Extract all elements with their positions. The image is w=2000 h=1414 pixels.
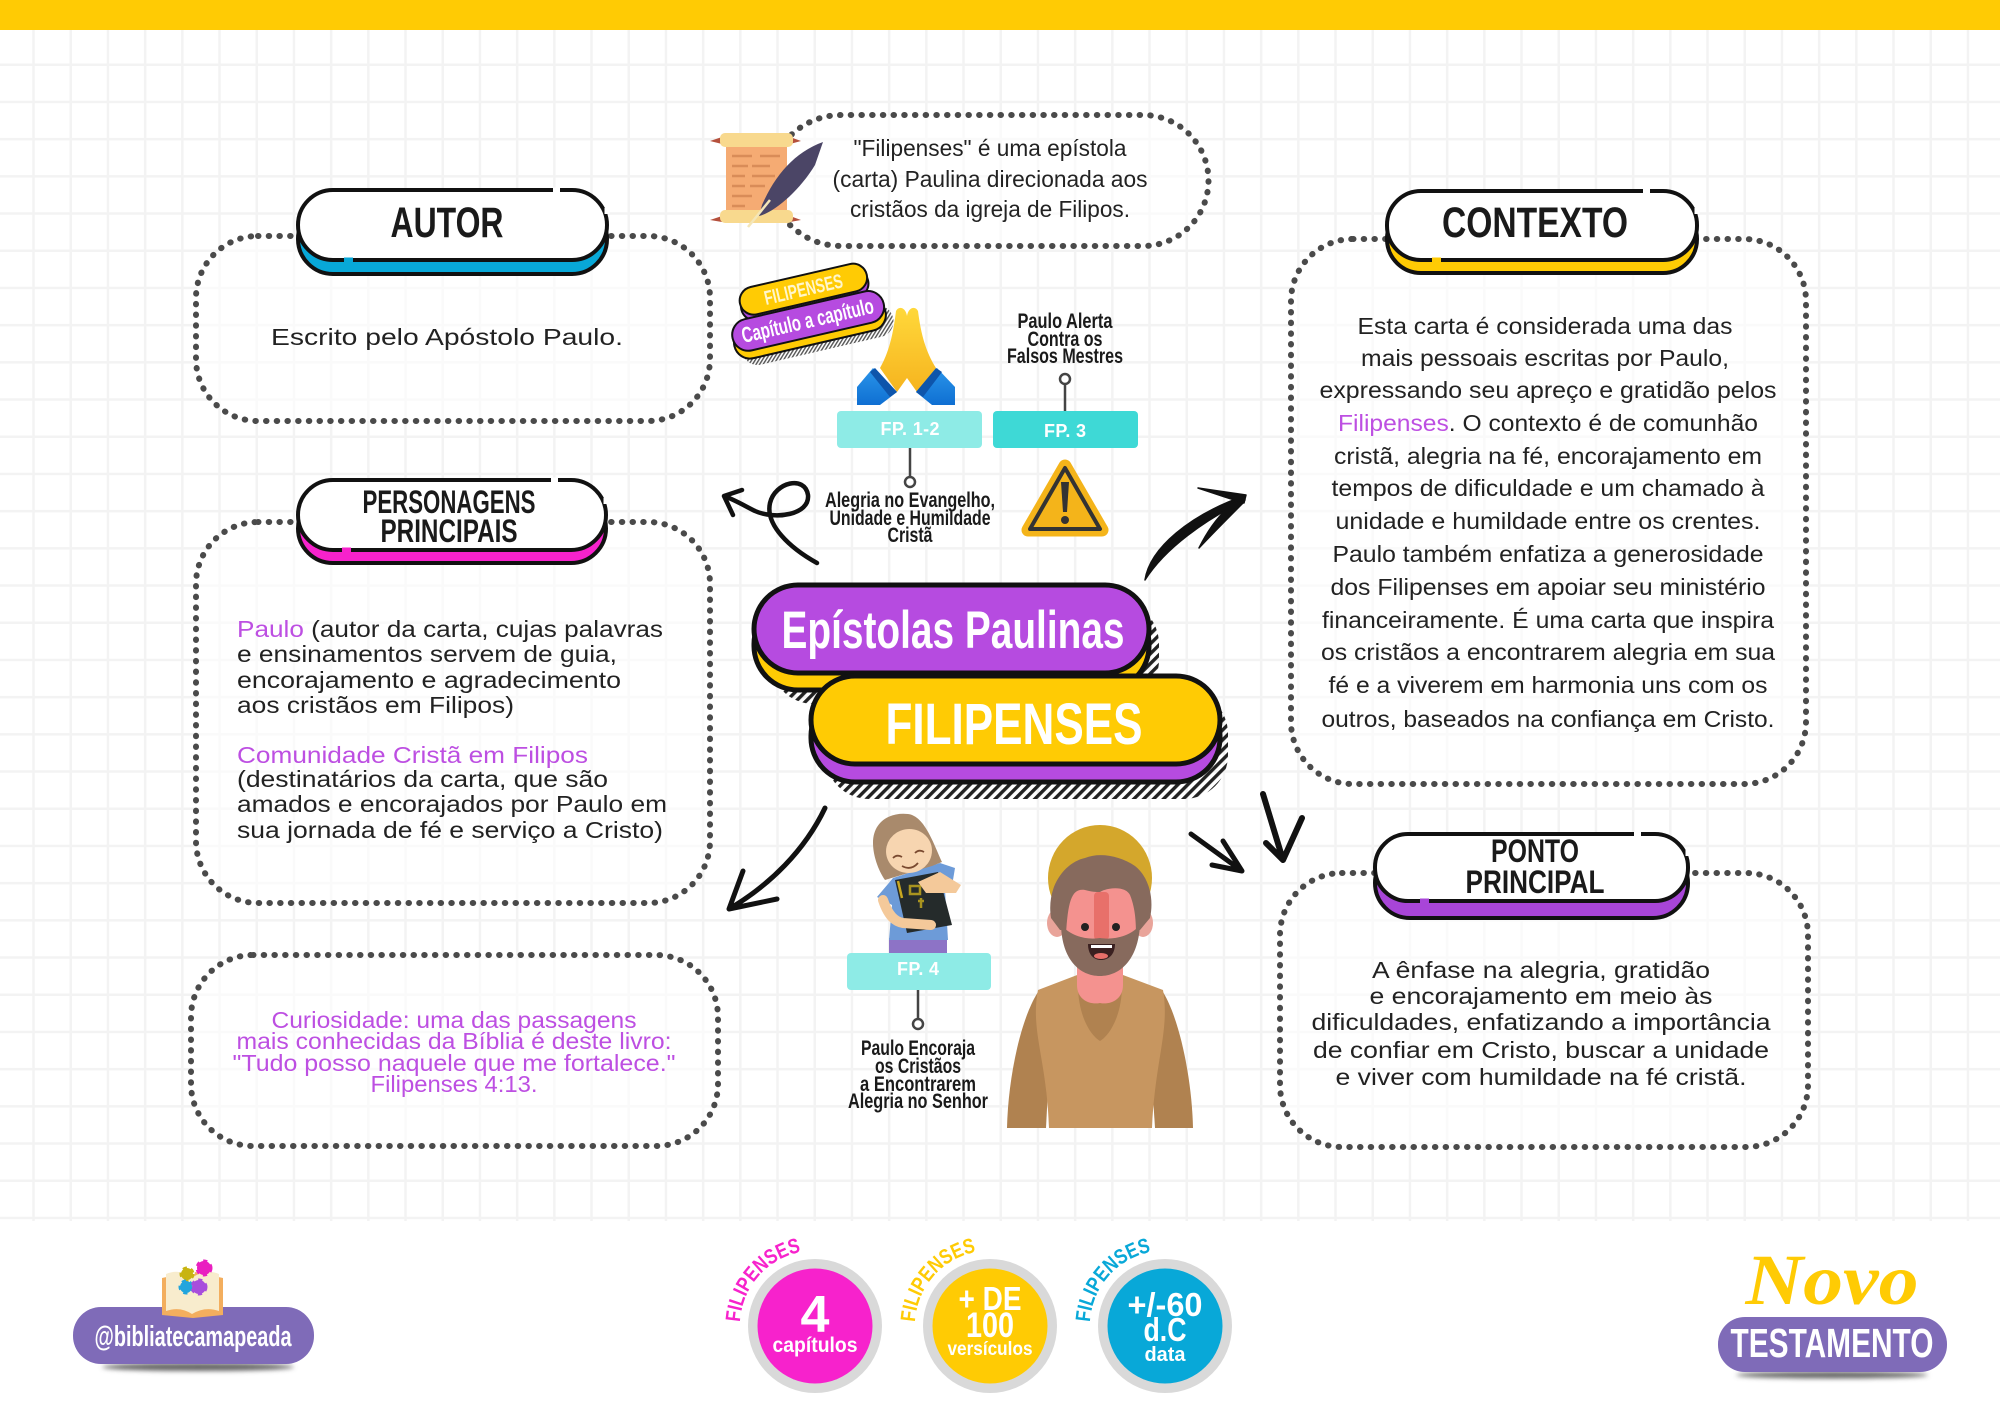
heading: contexto (1387, 191, 1697, 273)
text: paulo encoraja: Paulo Encoraja (861, 1037, 975, 1060)
text: contexto: financeiramente. É uma carta que inspira (1322, 607, 1774, 633)
text: paulo encoraja (848, 1037, 988, 1113)
panel: ponto principal (1280, 833, 1808, 1147)
text: ponto principal: A ênfase na alegria, gratidão (1372, 957, 1710, 983)
badge: data (1076, 1238, 1232, 1393)
text: personagens: amados e encorajados por Paulo em (237, 791, 667, 817)
label: fp 4: FP. 4 (897, 959, 939, 979)
text: alegria no evangelho: Cristã (888, 524, 933, 547)
badge: 4 capítulos: capítulos (772, 1334, 858, 1357)
heading: personagens principais: PERSONAGENS (362, 484, 536, 520)
text: contexto: tempos de dificuldade e um chamado à (1332, 475, 1765, 501)
top yellow bar (0, 0, 2000, 30)
panel: intro note: (carta) Paulina direcionada aos (832, 166, 1148, 192)
tag: capítulo a capítulo: Capítulo a capítulo (739, 293, 876, 348)
icon: girl hugging bible (873, 814, 961, 953)
heading: personagens principais (298, 480, 606, 563)
icon: book with puzzle pieces (162, 1261, 223, 1318)
panel: intro note: cristãos da igreja de Filipos. (850, 196, 1130, 222)
text: paulo alerta (1007, 310, 1123, 368)
tag: capítulo a capítulo: FILIPENSES (762, 270, 845, 310)
heading: ponto principal (1375, 833, 1688, 918)
badge: mais de 100 versículos: + DE (958, 1280, 1022, 1317)
text: contexto: unidade e humildade entre os crentes. (1336, 508, 1760, 534)
heading: filipenses: FILIPENSES (886, 692, 1142, 757)
tag: capítulo a capítulo (722, 257, 897, 370)
text: autor: Escrito pelo Apóstolo Paulo. (271, 324, 623, 350)
text: personagens: encorajamento e agradecimento (237, 667, 621, 693)
heading: epistolas paulinas: Epístolas Paulinas (782, 601, 1124, 660)
logo: novo testamento: Novo (1744, 1240, 1918, 1320)
badge: mais de 100 versículos: FILIPENSES (900, 1238, 974, 1321)
connector: fp 1-2 (905, 448, 915, 487)
illustration: apostle paul (1007, 825, 1193, 1128)
text: alegria no evangelho: Unidade e Humildade (830, 507, 990, 530)
icon: warning triangle (1028, 466, 1102, 530)
logo: biblioteca mapeada (73, 1261, 314, 1371)
badge: mais de 100 versículos (900, 1238, 1057, 1393)
panel: personagens principais (196, 480, 710, 903)
badge: mais de 100 versículos: 100 (966, 1306, 1014, 1345)
text: contexto: expressando seu apreço e gratidão pelos (1320, 377, 1776, 403)
heading: autor: AUTOR (390, 199, 504, 247)
text: personagens: sua jornada de fé e serviço a Cristo) (237, 817, 663, 843)
text: contexto: dos Filipenses em apoiar seu ministério (1330, 574, 1766, 600)
text: paulo encoraja: a Encontrarem (860, 1073, 976, 1096)
label: fp 1-2: FP. 1-2 (880, 419, 940, 439)
text: ponto principal: e encorajamento em meio às (1370, 983, 1712, 1009)
text: paulo alerta: Paulo Alerta (1018, 310, 1113, 333)
badge: 4 capítulos: FILIPENSES (726, 1238, 800, 1321)
badge: data: +/-60 (1128, 1286, 1202, 1323)
text: contexto (1320, 313, 1776, 732)
arrow: up right to contexto (1145, 488, 1246, 580)
logo: novo testamento (1718, 1240, 1947, 1378)
heading: personagens principais: PRINCIPAIS (380, 513, 518, 549)
arrow: down left (729, 808, 825, 909)
text: personagens: e ensinamentos servem de guia, (237, 641, 617, 667)
text: contexto: fé e a viverem em harmonia uns com os (1328, 672, 1768, 698)
text: contexto: Esta carta é considerada uma das (1358, 313, 1732, 339)
label: fp 3: FP. 3 (1044, 421, 1086, 441)
text: personagens: Comunidade Cristã em Filipos (237, 742, 588, 768)
text: alegria no evangelho: Alegria no Evangelho, (825, 489, 995, 512)
title block (754, 585, 1228, 799)
panel: intro note: "Filipenses" é uma epístola (854, 135, 1127, 161)
panel: curiosidade: mais conhecidas da Bíblia é deste livro: (236, 1028, 672, 1054)
text: contexto: mais pessoais escritas por Paulo, (1361, 345, 1729, 371)
heading: ponto principal: PONTO (1491, 833, 1579, 869)
connector: fp 4 (913, 990, 923, 1029)
text: contexto: os cristãos a encontrarem alegria em sua (1321, 639, 1775, 665)
panel: curiosidade: Curiosidade: uma das passagens (272, 1007, 636, 1033)
panel: intro note (790, 115, 1208, 246)
text: ponto principal: de confiar em Cristo, buscar a unidade (1313, 1037, 1769, 1063)
heading: autor (298, 190, 607, 274)
icon: praying hands (857, 308, 955, 405)
panel: autor (196, 190, 710, 421)
arrow: curl to personagens (724, 483, 817, 563)
text: ponto principal: dificuldades, enfatizando a importância (1312, 1009, 1771, 1035)
label: fp 4 (847, 953, 991, 990)
panel: curiosidade (191, 955, 718, 1146)
badge: 4 capítulos (726, 1238, 882, 1393)
icon: scroll and feather (710, 133, 823, 227)
arrow: down to ponto principal (1263, 794, 1302, 860)
text: personagens: aos cristãos em Filipos) (237, 692, 514, 718)
text: personagens: (destinatários da carta, que são (237, 766, 608, 792)
text: paulo alerta: Falsos Mestres (1007, 345, 1123, 368)
text: contexto: cristã, alegria na fé, encorajamento em (1334, 443, 1762, 469)
text: alegria no evangelho (825, 489, 995, 547)
text: ponto principal: e viver com humildade na fé cristã. (1336, 1064, 1746, 1090)
panel: contexto (1291, 191, 1806, 784)
text: contexto: outros, baseados na confiança em Cristo. (1322, 706, 1774, 732)
badge: 4 capítulos: 4 (801, 1286, 830, 1344)
badge: data: FILIPENSES (1076, 1238, 1150, 1321)
badge: data: data (1144, 1344, 1186, 1366)
label: fp 3 (993, 411, 1138, 448)
arrow: small right (1191, 834, 1242, 871)
text: contexto: Paulo também enfatiza a generosidade (1332, 541, 1764, 567)
panel: curiosidade: Filipenses 4:13. (370, 1071, 538, 1097)
text: personagens: Paulo (autor da carta, cujas palavras (237, 616, 663, 642)
text: personagens (237, 616, 667, 843)
heading: ponto principal: PRINCIPAL (1466, 864, 1604, 900)
connector: fp 3 (1060, 374, 1070, 411)
text: contexto: Filipenses . O contexto é de comunhão (1338, 410, 1758, 436)
heading: contexto: CONTEXTO (1442, 199, 1628, 247)
text: paulo encoraja: Alegria no Senhor (848, 1090, 988, 1113)
text: paulo alerta: Contra os (1028, 328, 1102, 351)
badge: mais de 100 versículos: versículos (948, 1339, 1032, 1360)
badge: data: d.C (1144, 1311, 1186, 1348)
label: fp 1-2 (837, 411, 982, 448)
text: paulo encoraja: os Cristãos (875, 1055, 961, 1078)
panel: curiosidade: "Tudo posso naquele que me fortalece." (232, 1050, 676, 1076)
logo: biblioteca mapeada: @bibliatecamapeada (94, 1321, 292, 1353)
text: ponto principal (1312, 957, 1771, 1090)
